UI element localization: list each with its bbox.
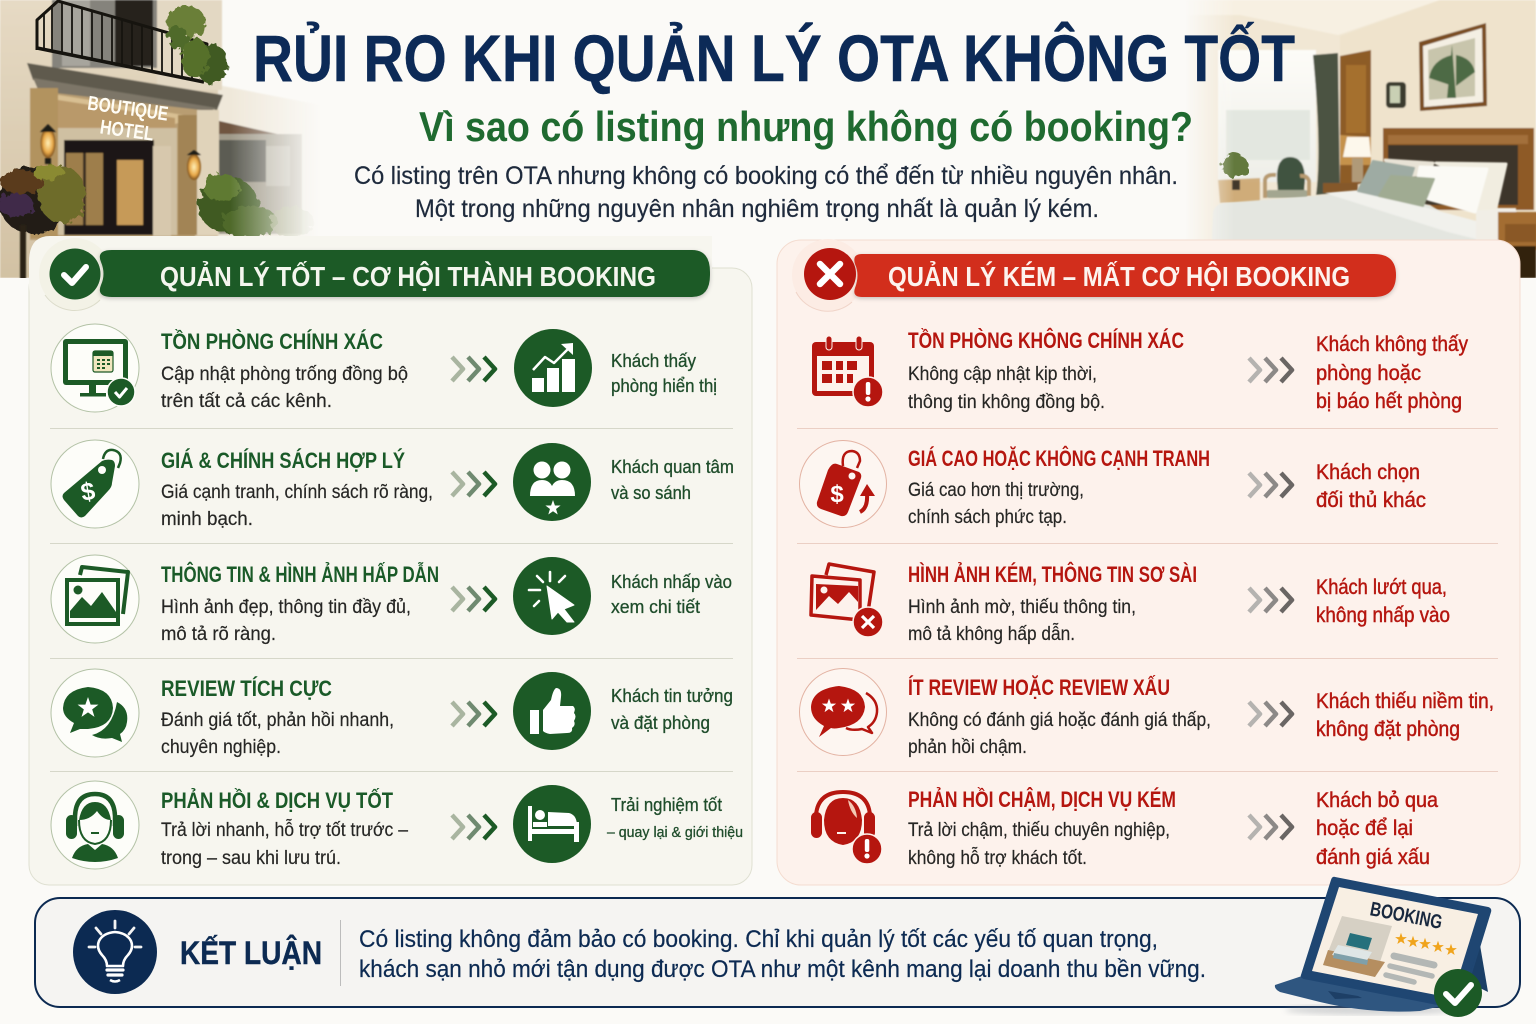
arrow chevrons — [452, 815, 495, 839]
photo: boutique hotel exterior — [0, 0, 320, 280]
row 2: price and policy: Giá cạnh tranh, chính sách rõ ràng, — [161, 482, 433, 503]
arrow chevrons — [452, 702, 495, 726]
label: booking: BOOKING — [1368, 898, 1444, 934]
hotel sign: BOUTIQUE — [86, 93, 169, 126]
hotel sign — [88, 96, 168, 141]
row 4: bad reviews — [800, 668, 1494, 758]
row 1: accurate inventory: TỒN PHÒNG CHÍNH XÁC — [161, 329, 383, 354]
arrow chevrons — [452, 357, 495, 381]
icon: red cross — [804, 248, 856, 300]
arrow chevrons — [452, 472, 495, 496]
row 3: information and images: Khách nhấp vào — [611, 572, 732, 592]
row 3: poor images — [811, 562, 1450, 645]
intro text: Một trong những nguyên nhân nghiêm trọng nhất là quản lý kém. — [415, 195, 1099, 223]
icon: green check — [50, 248, 100, 300]
row 2: high price — [800, 440, 1426, 528]
row 4: positive reviews — [51, 669, 733, 758]
row 1: inaccurate inventory: thông tin không đồng bộ. — [908, 392, 1105, 413]
row 3: information and images: mô tả rõ ràng. — [161, 624, 276, 645]
row 3: poor images: Hình ảnh mờ, thiếu thông tin, — [908, 597, 1136, 618]
row 1: inaccurate inventory: phòng hoặc — [1316, 362, 1421, 385]
row 4: bad reviews: Khách thiếu niềm tin, — [1316, 690, 1494, 713]
row 3: poor images: HÌNH ẢNH KÉM, THÔNG TIN SƠ SÀI — [908, 562, 1197, 587]
row 2: high price: Giá cao hơn thị trường, — [908, 480, 1084, 501]
row 5: slow response: PHẢN HỒI CHẬM, DỊCH VỤ KÉM — [908, 787, 1176, 812]
icon: bed — [513, 785, 591, 863]
conclusion panel: KẾT LUẬN — [180, 935, 322, 971]
title: RỦI RO KHI QUẢN LÝ OTA KHÔNG TỐT — [253, 21, 1295, 95]
row 5: slow response: đánh giá xấu — [1316, 846, 1430, 869]
row 1: inaccurate inventory: TỒN PHÒNG KHÔNG CHÍNH XÁC — [908, 328, 1184, 353]
row 5: response and service — [51, 781, 743, 869]
arrow chevrons — [1249, 473, 1292, 497]
row 4: positive reviews: và đặt phòng — [611, 713, 710, 733]
hotel sign: HOTEL — [99, 116, 155, 146]
row 1: accurate inventory: trên tất cả các kênh. — [161, 391, 332, 412]
icon: green check badge — [1434, 969, 1482, 1017]
icon: thumbs up — [513, 672, 591, 750]
row 1: accurate inventory: Khách thấy — [611, 351, 696, 371]
icon: price tag — [51, 440, 139, 528]
header banner: good management — [50, 248, 710, 300]
panel: good management — [29, 236, 752, 885]
icon: photos — [51, 555, 139, 643]
icon: rising chart — [514, 329, 592, 407]
row 1: accurate inventory — [51, 324, 717, 412]
row 4: positive reviews: Khách tin tưởng — [611, 686, 733, 706]
header banner: poor management: QUẢN LÝ KÉM – MẤT CƠ HỘI BOOKING — [888, 260, 1350, 292]
row 1: accurate inventory: phòng hiển thị — [611, 376, 717, 396]
row 5: response and service: Trải nghiệm tốt — [611, 795, 722, 815]
row 1: inaccurate inventory: Khách không thấy — [1316, 333, 1468, 356]
row 5: response and service: – quay lại & giới thiệu — [607, 824, 743, 841]
icon: photos with cross — [811, 564, 883, 637]
icon: agent with alert — [811, 792, 882, 864]
icon: chat with two stars — [800, 668, 886, 756]
row 5: slow response: hoặc để lại — [1316, 817, 1413, 840]
row 3: poor images: mô tả không hấp dẫn. — [908, 623, 1075, 645]
icon: cursor click — [513, 557, 591, 635]
panel background: good management — [29, 236, 752, 885]
row 4: bad reviews: không đặt phòng — [1316, 718, 1460, 741]
row 2: high price: GIÁ CAO HOẶC KHÔNG CẠNH TRANH — [908, 446, 1210, 471]
row 3: poor images: không nhấp vào — [1316, 604, 1450, 627]
row 2: price and policy: GIÁ & CHÍNH SÁCH HỢP LÝ — [161, 448, 405, 473]
row 4: positive reviews: REVIEW TÍCH CỰC — [161, 676, 332, 701]
row 1: inaccurate inventory: Không cập nhật kịp thời, — [908, 364, 1097, 385]
row 5: response and service: trong – sau khi lưu trú. — [161, 848, 341, 869]
header banner: poor management — [804, 248, 1396, 300]
row 2: high price: đối thủ khác — [1316, 489, 1426, 512]
icon: laptop with booking page — [1275, 878, 1490, 1017]
icon: price tag with up arrow — [800, 440, 886, 528]
row 4: bad reviews: Không có đánh giá hoặc đánh giá thấp, — [908, 710, 1211, 731]
row 5: slow response: không hỗ trợ khách tốt. — [908, 847, 1087, 869]
subtitle: Vì sao có listing nhưng không có booking? — [419, 103, 1193, 150]
row 2: price and policy: Khách quan tâm — [611, 457, 734, 477]
row 1: inaccurate inventory — [812, 328, 1468, 413]
arrow chevrons — [1249, 358, 1292, 382]
row 1: accurate inventory: Cập nhật phòng trống đồng bộ — [161, 364, 408, 385]
plants and lamps — [0, 6, 314, 238]
row 2: price and policy: minh bạch. — [161, 509, 253, 530]
panel background: poor management — [777, 239, 1520, 885]
photo: hotel bedroom — [1185, 0, 1536, 278]
row 3: information and images — [51, 555, 732, 645]
row 2: price and policy — [51, 440, 734, 530]
icon: headset agent — [51, 781, 139, 869]
intro text — [354, 162, 1178, 223]
conclusion panel: Có listing không đảm bảo có booking. Chỉ khi quản lý tốt các yếu tố quan trọng, — [359, 926, 1158, 953]
row 5: slow response — [811, 787, 1438, 869]
icon: price tag with up arrow: $ — [830, 481, 844, 508]
row 4: positive reviews: chuyên nghiệp. — [161, 737, 281, 758]
conclusion panel: khách sạn nhỏ mới tận dụng được OTA như một kênh mang lại doanh thu bền vững. — [359, 956, 1206, 983]
arrow chevrons — [1249, 815, 1292, 839]
five stars — [1395, 933, 1457, 955]
row 5: slow response: Trả lời chậm, thiếu chuyên nghiệp, — [908, 820, 1170, 841]
row 4: bad reviews: ÍT REVIEW HOẶC REVIEW XẤU — [908, 675, 1170, 700]
icon: price tag: $ — [79, 477, 97, 507]
icon: light bulb — [73, 910, 157, 994]
icon: chat with star — [51, 669, 139, 757]
icon: calendar alert — [812, 336, 883, 407]
row 2: high price: Khách chọn — [1316, 461, 1420, 484]
row 5: slow response: Khách bỏ qua — [1316, 789, 1438, 812]
header banner: good management: QUẢN LÝ TỐT – CƠ HỘI THÀNH BOOKING — [160, 260, 656, 292]
intro text: Có listing trên OTA nhưng không có booking có thể đến từ nhiều nguyên nhân. — [354, 162, 1178, 190]
row 1: inaccurate inventory: bị báo hết phòng — [1316, 390, 1462, 413]
row 4: bad reviews: phản hồi chậm. — [908, 737, 1027, 758]
row 2: price and policy: và so sánh — [611, 483, 691, 503]
row 3: poor images: Khách lướt qua, — [1316, 576, 1447, 599]
panel: poor management — [777, 239, 1520, 885]
row 3: information and images: Hình ảnh đẹp, thông tin đầy đủ, — [161, 597, 411, 618]
row 3: information and images: xem chi tiết — [611, 597, 700, 617]
conclusion panel — [35, 898, 1520, 1007]
row 5: response and service: Trả lời nhanh, hỗ trợ tốt trước – — [161, 819, 408, 841]
row 4: positive reviews: Đánh giá tốt, phản hồi nhanh, — [161, 710, 394, 731]
icon: people with star — [513, 443, 591, 521]
icon: monitor with calendar — [51, 324, 139, 412]
arrow chevrons — [1249, 588, 1292, 612]
row 2: high price: chính sách phức tạp. — [908, 507, 1067, 528]
row 5: response and service: PHẢN HỒI & DỊCH VỤ TỐT — [161, 787, 393, 813]
row 3: information and images: THÔNG TIN & HÌNH ẢNH HẤP DẪN — [161, 561, 439, 587]
arrow chevrons — [452, 587, 495, 611]
arrow chevrons — [1249, 702, 1292, 726]
